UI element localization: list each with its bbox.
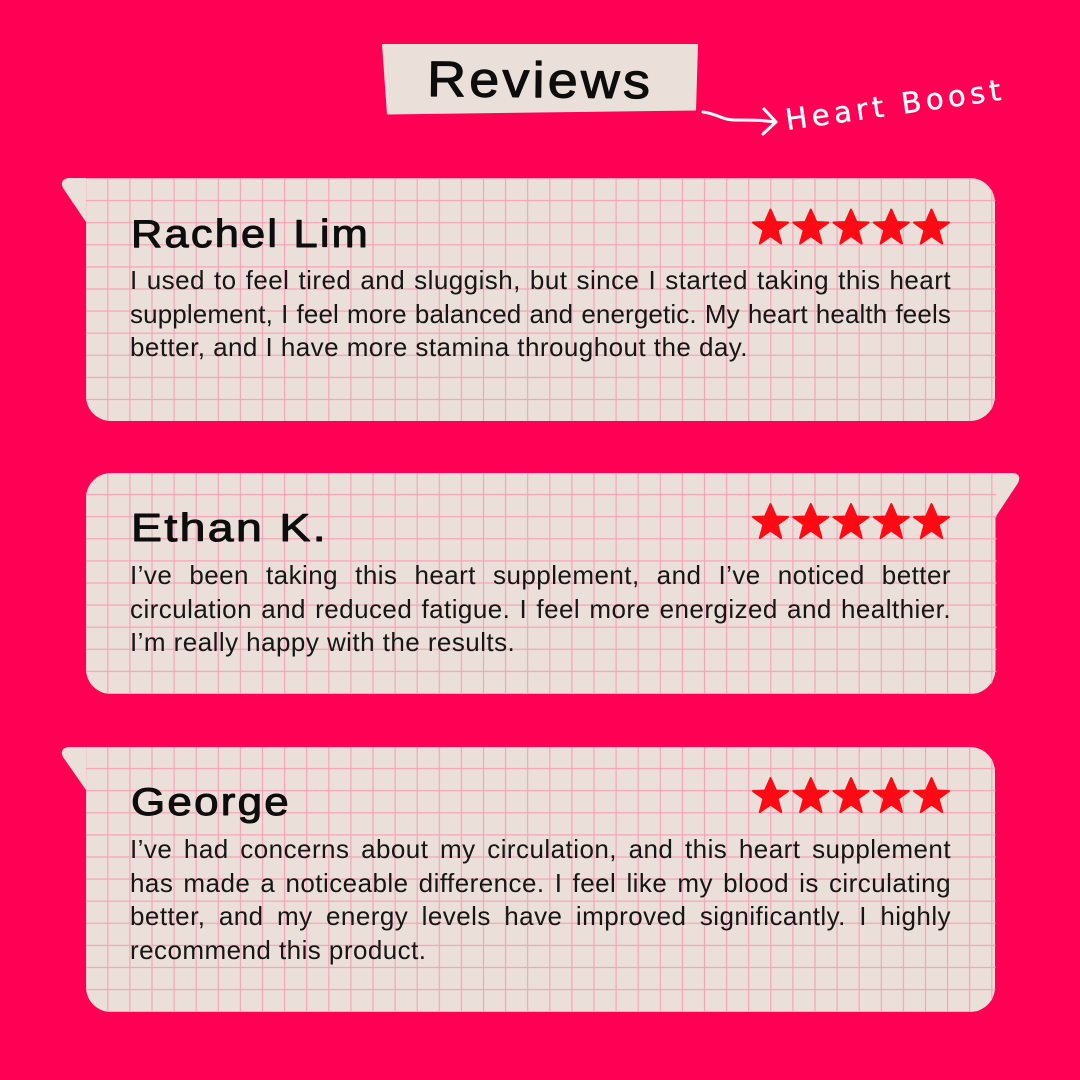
review text George: has made a noticeable difference. I feel like my blood is circulating: [130, 868, 951, 898]
title: Reviews: [427, 51, 653, 109]
review text George: I’ve had concerns about my circulation, and this heart supplement: [130, 834, 951, 864]
name George: George: [131, 781, 291, 824]
review text Ethan K.: I’m really happy with the results.: [130, 627, 515, 657]
arrow: [703, 109, 776, 134]
review text George: [130, 834, 951, 964]
review text Rachel Lim: [130, 265, 951, 362]
review text Rachel Lim: supplement, I feel more balanced and energetic. My heart health feels: [130, 298, 951, 328]
panel: review card George: [62, 747, 996, 1012]
stars 3: [753, 778, 949, 812]
title label box: [382, 44, 698, 114]
brand label: Heart Boost: [783, 73, 1003, 137]
review text Ethan K.: I’ve been taking this heart supplement, and I’ve noticed better: [130, 560, 951, 590]
panel: review card Ethan K.: [86, 473, 1019, 694]
review text Rachel Lim: I used to feel tired and sluggish, but since I started taking this heart: [130, 265, 951, 295]
review text Ethan K.: [130, 560, 951, 657]
panel: review card Rachel Lim: [62, 178, 996, 421]
stars 2: [753, 504, 949, 538]
review text George: recommend this product.: [130, 934, 426, 964]
name Ethan K.: Ethan K.: [131, 507, 328, 550]
review text George: better, and my energy levels have improved significantly. I highly: [130, 901, 951, 931]
name Rachel Lim: Rachel Lim: [131, 213, 370, 256]
review text Ethan K.: circulation and reduced fatigue. I feel more energized and healthier.: [130, 594, 951, 624]
stars 1: [753, 210, 949, 244]
review text Rachel Lim: better, and I have more stamina throughout the day.: [130, 332, 748, 362]
